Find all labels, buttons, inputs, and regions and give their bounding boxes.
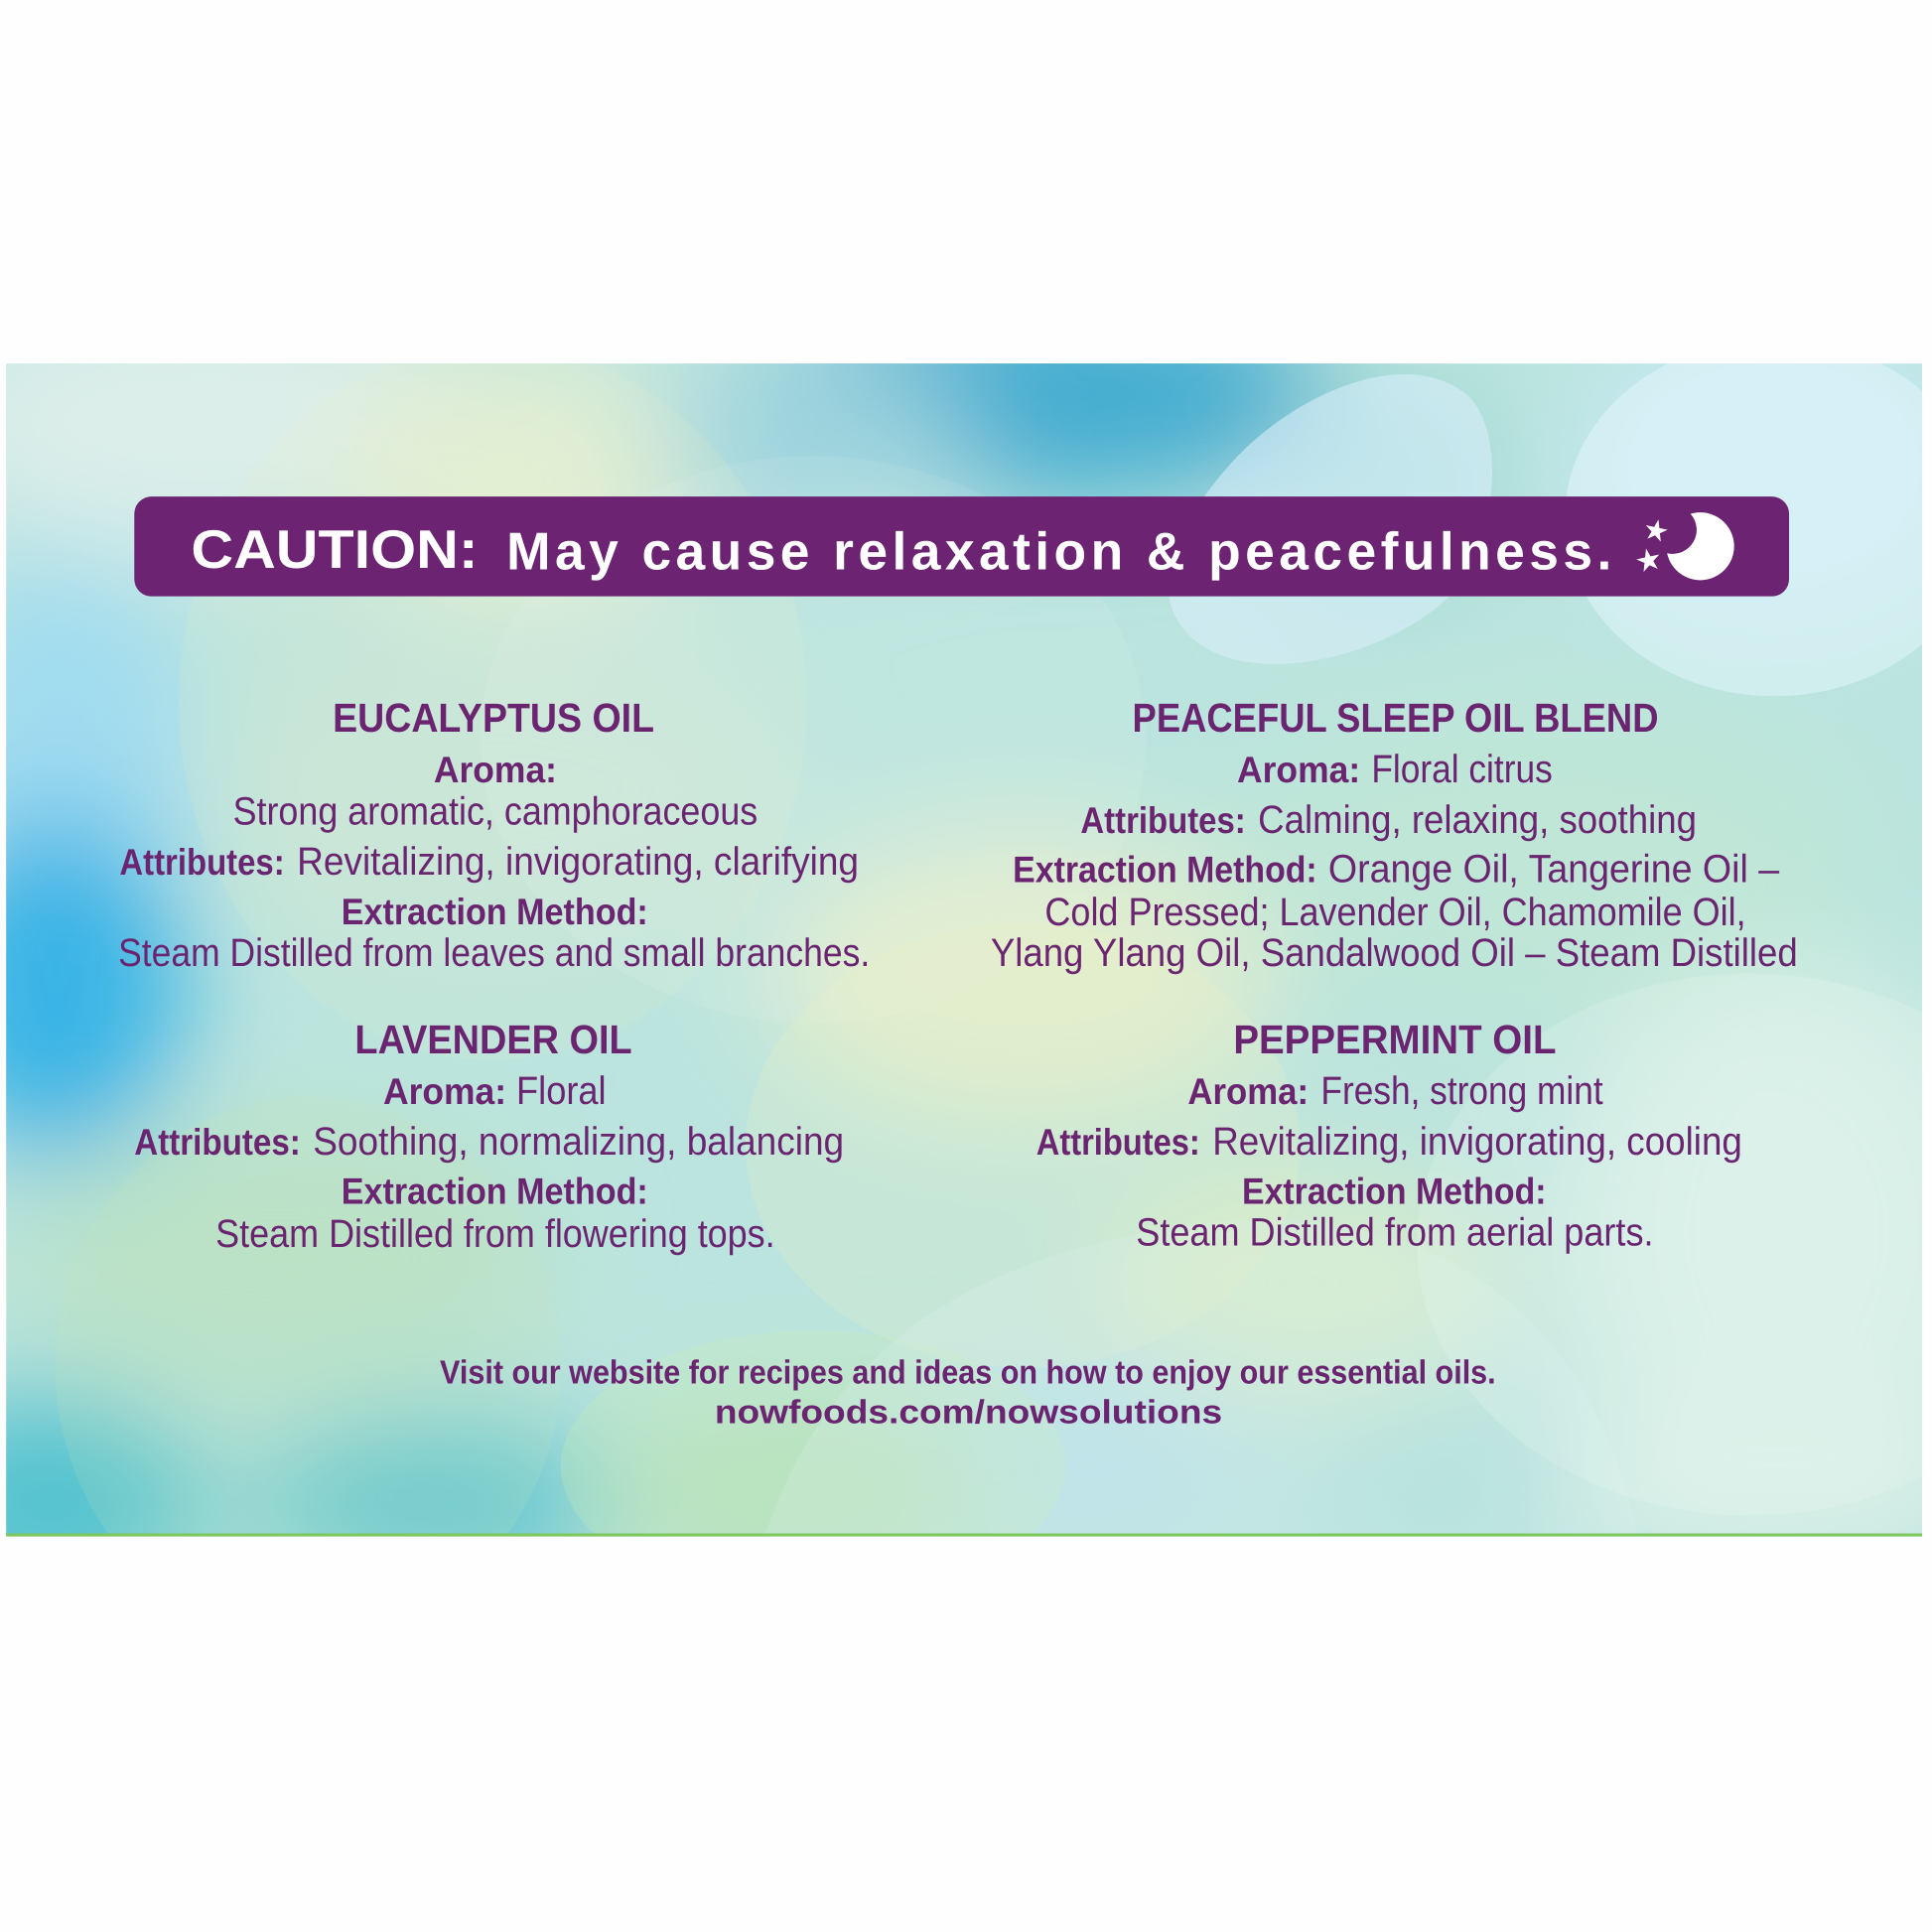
attributes line: Soothing, normalizing, balancing: [313, 1119, 844, 1164]
panel: peaceful sleep oil blend: [991, 695, 1798, 975]
attributes line: Calming, relaxing, soothing: [1258, 797, 1697, 842]
aroma line: [1187, 1068, 1603, 1113]
aroma line: Fresh, strong mint: [1320, 1068, 1603, 1113]
caution text: May cause relaxation & peacefulness.: [506, 522, 1611, 582]
background shapes: [56, 339, 1932, 1639]
aroma line: Floral citrus: [1371, 747, 1553, 791]
aroma value: Strong aromatic, camphoraceous: [233, 788, 758, 833]
extraction lines: Ylang Ylang Oil, Sandalwood Oil – Steam Distilled: [991, 930, 1798, 975]
extraction value: Steam Distilled from flowering tops.: [215, 1211, 775, 1256]
caution banner: [134, 496, 1789, 597]
caution text: CAUTION:: [191, 520, 479, 581]
attributes line: Revitalizing, invigorating, cooling: [1212, 1119, 1742, 1164]
extraction label: Extraction Method:: [342, 1172, 648, 1212]
footer text: nowfoods.com/nowsolutions: [715, 1394, 1222, 1431]
extraction label: Extraction Method:: [342, 893, 648, 932]
panel: peppermint oil: [1036, 1017, 1742, 1254]
extraction label: Extraction Method:: [1242, 1172, 1547, 1212]
panel: lavender oil: [134, 1017, 844, 1256]
attributes line: Attributes:: [1080, 801, 1246, 842]
footer text: [440, 1354, 1496, 1431]
attributes line: Attributes:: [119, 843, 285, 884]
attributes line: [1080, 797, 1697, 842]
background panel: [6, 363, 1922, 1535]
aroma label: Aroma:: [434, 751, 557, 791]
attributes line: Revitalizing, invigorating, clarifying: [297, 839, 859, 884]
aroma line: Aroma:: [1237, 751, 1360, 791]
aroma line: [1237, 747, 1553, 791]
icon: moon and stars: [1634, 512, 1734, 580]
heading: peppermint: PEPPERMINT OIL: [1233, 1017, 1556, 1062]
panel: eucalyptus oil: [118, 695, 870, 975]
aroma line: Aroma:: [383, 1072, 506, 1113]
heading: peaceful sleep: PEACEFUL SLEEP OIL BLEND: [1133, 695, 1658, 741]
heading: lavender: LAVENDER OIL: [354, 1017, 632, 1062]
extraction value: Steam Distilled from leaves and small branches.: [118, 930, 870, 975]
extraction lines: Extraction Method:: [1013, 850, 1317, 891]
heading: eucalyptus: EUCALYPTUS OIL: [333, 695, 654, 741]
aroma line: [383, 1068, 607, 1113]
extraction lines: Orange Oil, Tangerine Oil –: [1328, 847, 1779, 891]
attributes line: Attributes:: [134, 1123, 301, 1164]
extraction lines: [991, 847, 1798, 975]
extraction lines: Cold Pressed; Lavender Oil, Chamomile Oil,: [1044, 890, 1746, 934]
green bottom rule: [6, 1534, 1922, 1537]
extraction value: Steam Distilled from aerial parts.: [1136, 1210, 1654, 1254]
footer text: Visit our website for recipes and ideas on how to enjoy our essential oils.: [440, 1354, 1496, 1391]
attributes line: Attributes:: [1036, 1123, 1200, 1164]
aroma line: Aroma:: [1187, 1072, 1309, 1113]
aroma line: Floral: [516, 1068, 607, 1113]
